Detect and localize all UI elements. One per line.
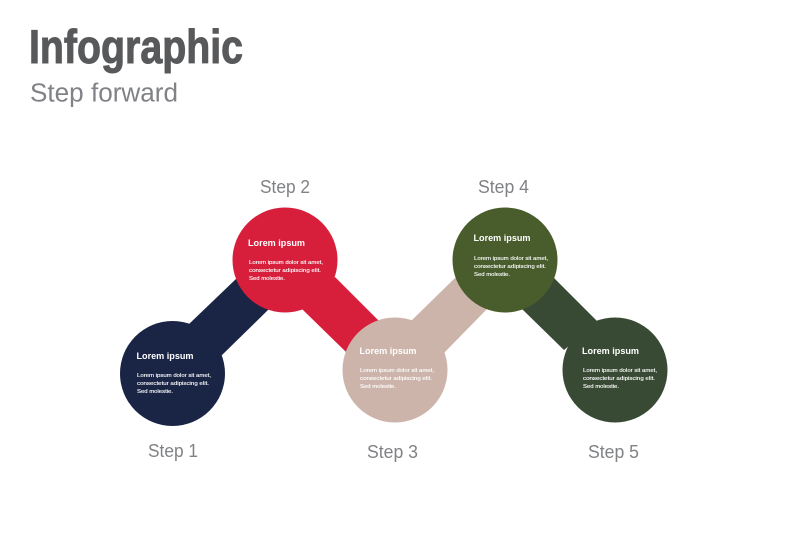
step 1 node: Lorem ipsum dolor sit amet, — [137, 373, 212, 379]
step 4 node — [452, 208, 558, 312]
step 3 node: Sed molestie. — [360, 384, 396, 390]
step 2 node: consectetur adipiscing elit. — [249, 268, 321, 274]
step 5 node: consectetur adipiscing elit. — [583, 376, 655, 382]
step 2 node: Sed molestie. — [249, 276, 285, 282]
step 1 node: Sed molestie. — [137, 389, 173, 395]
connector: step 1 to step 2 — [188, 278, 269, 357]
step 5 node: Sed molestie. — [583, 384, 619, 390]
step 3 node — [342, 318, 448, 422]
step 1 node: Lorem ipsum — [136, 351, 194, 362]
step 4 node: Lorem ipsum dolor sit amet, — [474, 256, 549, 262]
subtitle: Step forward — [30, 80, 178, 108]
step 4 node: Lorem ipsum — [474, 233, 530, 244]
step 3 node: consectetur adipiscing elit. — [360, 376, 432, 382]
step 1 label: Step 1 — [148, 441, 198, 461]
step 5 label: Step 5 — [588, 442, 639, 462]
step 3 node: Lorem ipsum — [360, 346, 416, 357]
step 5 node — [562, 318, 668, 422]
step 5 node: Lorem ipsum dolor sit amet, — [583, 368, 658, 374]
connector: step 2 to step 3 — [302, 277, 379, 352]
step 4 node: Sed molestie. — [474, 272, 510, 278]
title: Infographic — [29, 20, 243, 73]
step 5 node: Lorem ipsum — [582, 346, 639, 357]
step 3 node: Lorem ipsum dolor sit amet, — [360, 368, 435, 374]
step 1 node — [120, 321, 225, 426]
step 2 node — [232, 208, 338, 312]
step 1 node: consectetur adipiscing elit. — [137, 381, 209, 387]
step 3 label: Step 3 — [367, 442, 418, 462]
step 4 node: consectetur adipiscing elit. — [474, 264, 546, 270]
step 2 node: Lorem ipsum dolor sit amet, — [249, 260, 324, 266]
step 2 node: Lorem ipsum — [248, 238, 305, 249]
step 2 label: Step 2 — [260, 177, 310, 197]
step 4 label: Step 4 — [478, 177, 529, 197]
connector: step 3 to step 4 — [411, 277, 487, 354]
connector: step 4 to step 5 — [522, 277, 598, 350]
